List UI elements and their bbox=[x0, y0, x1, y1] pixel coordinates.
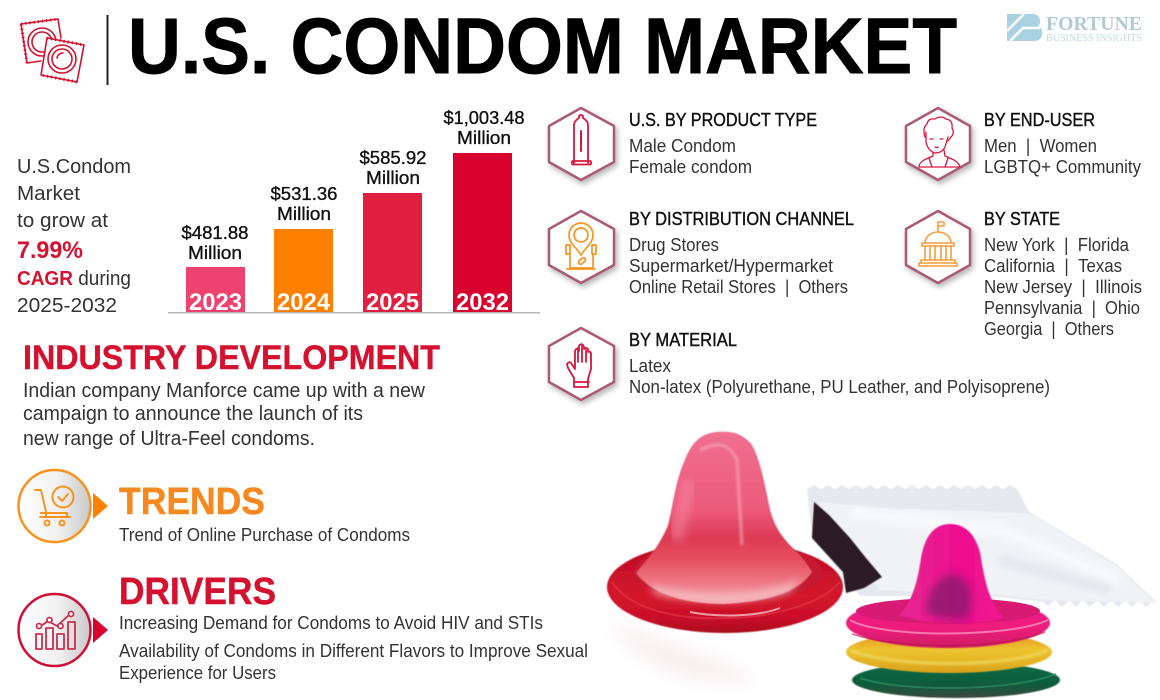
text: CAGR callout: CAGR during bbox=[17, 268, 131, 290]
bar 2032 bbox=[453, 153, 512, 316]
value labels: $531.36 bbox=[270, 184, 338, 204]
value labels: $481.88 bbox=[182, 223, 248, 243]
wrapper bbox=[807, 485, 1160, 607]
panel: by distribution channel: Drug Stores bbox=[629, 235, 719, 255]
icon: condom hexagon bbox=[549, 108, 614, 180]
panel: by end-user: LGBTQ+ Community bbox=[984, 157, 1141, 177]
text: CAGR callout: to grow at bbox=[17, 210, 108, 232]
text: CAGR callout: 2025-2032 bbox=[17, 295, 117, 317]
value labels: Million bbox=[366, 168, 420, 188]
icon: drivers bar chart bbox=[18, 594, 108, 666]
text: trends body: Trend of Online Purchase of Condoms bbox=[119, 525, 410, 545]
panel: by product type bbox=[549, 108, 817, 180]
text: industry development body: new range of Ultra-Feel condoms. bbox=[23, 428, 315, 450]
panel: by end-user: Men | Women bbox=[984, 136, 1097, 156]
panel: by end-user bbox=[906, 108, 1141, 180]
value labels: Million bbox=[188, 243, 242, 263]
bar 2023: 2023 bbox=[189, 289, 242, 316]
value labels: Million bbox=[277, 204, 331, 224]
panel: by state: New Jersey | Illinois bbox=[984, 277, 1142, 297]
icon: glove hexagon bbox=[549, 328, 614, 400]
bar 2025: 2025 bbox=[366, 289, 419, 316]
text: CAGR callout: U.S.Condom bbox=[17, 156, 131, 178]
panel: by state: Pennsylvania | Ohio bbox=[984, 298, 1140, 318]
icon: person hexagon bbox=[906, 108, 970, 180]
bar 2023 bbox=[186, 267, 245, 316]
panel: by distribution channel bbox=[549, 209, 854, 297]
panel: by distribution channel: BY DISTRIBUTION CHANNEL bbox=[629, 209, 854, 229]
bar 2032: 2032 bbox=[456, 289, 509, 316]
text: CAGR callout: Market bbox=[17, 183, 80, 205]
panel: by product type: U.S. BY PRODUCT TYPE bbox=[629, 110, 817, 130]
value labels: Million bbox=[457, 128, 511, 148]
panel: by state: New York | Florida bbox=[984, 235, 1130, 255]
panel: by material: BY MATERIAL bbox=[629, 330, 737, 350]
bar 2024 bbox=[274, 229, 333, 316]
photo: condoms and wrapper bbox=[607, 432, 1160, 698]
icon: drug store pin hexagon bbox=[549, 211, 614, 283]
icon: condom packets bbox=[21, 19, 84, 82]
heading: trends: TRENDS bbox=[119, 481, 265, 523]
panel: by end-user: BY END-USER bbox=[984, 110, 1095, 130]
icon: capitol hexagon bbox=[906, 211, 970, 283]
panel: by state bbox=[906, 209, 1142, 339]
green ring bbox=[852, 662, 1060, 698]
text: industry development body: campaign to announce the launch of its bbox=[23, 403, 363, 425]
panel: by distribution channel: Supermarket/Hypermarket bbox=[629, 256, 833, 276]
yellow ring bbox=[846, 631, 1052, 673]
value labels: $585.92 bbox=[360, 148, 426, 168]
text: drivers body: Increasing Demand for Condoms to Avoid HIV and STIs bbox=[119, 613, 543, 633]
text: drivers body: Experience for Users bbox=[119, 663, 276, 683]
panel: by state: BY STATE bbox=[984, 209, 1060, 229]
text: industry development body: Indian company Manforce came up with a new bbox=[23, 380, 426, 402]
panel: by distribution channel: Online Retail Stores | Others bbox=[629, 277, 848, 297]
text: industry development body bbox=[23, 380, 426, 450]
panel: by material: Non-latex (Polyurethane, PU Leather, and Polyisoprene) bbox=[629, 377, 1050, 397]
bar 2024: 2024 bbox=[277, 289, 331, 316]
text: drivers body: Availability of Condoms in Different Flavors to Improve Sexual bbox=[119, 641, 588, 661]
logo: Fortune Business Insights: BUSINESS INSIGHTS bbox=[1046, 32, 1142, 44]
value labels: $1,003.48 bbox=[444, 108, 524, 128]
logo: Fortune Business Insights: FORTUNE bbox=[1046, 13, 1142, 35]
value labels bbox=[182, 108, 524, 263]
text: CAGR callout: 7.99% bbox=[17, 237, 83, 264]
bar chart: market size bbox=[168, 108, 540, 316]
panel: by material: Latex bbox=[629, 356, 671, 376]
text: CAGR callout bbox=[17, 156, 131, 317]
panel: by product type: Female condom bbox=[629, 157, 752, 177]
heading: industry development: INDUSTRY DEVELOPMENT bbox=[23, 339, 440, 377]
icon: trends shopping cart bbox=[18, 470, 108, 542]
title divider bbox=[106, 15, 108, 85]
panel: by state: California | Texas bbox=[984, 256, 1122, 276]
title: U.S. CONDOM MARKET bbox=[128, 1, 957, 90]
logo: Fortune Business Insights bbox=[1007, 13, 1142, 44]
panel: by state: Georgia | Others bbox=[984, 319, 1114, 339]
bar 2025 bbox=[363, 193, 422, 316]
panel: by product type: Male Condom bbox=[629, 136, 736, 156]
panel: by material bbox=[549, 328, 1050, 400]
pink condom bbox=[846, 524, 1050, 648]
text: drivers body bbox=[119, 613, 588, 683]
heading: drivers: DRIVERS bbox=[119, 571, 276, 613]
red condom bbox=[607, 432, 843, 633]
